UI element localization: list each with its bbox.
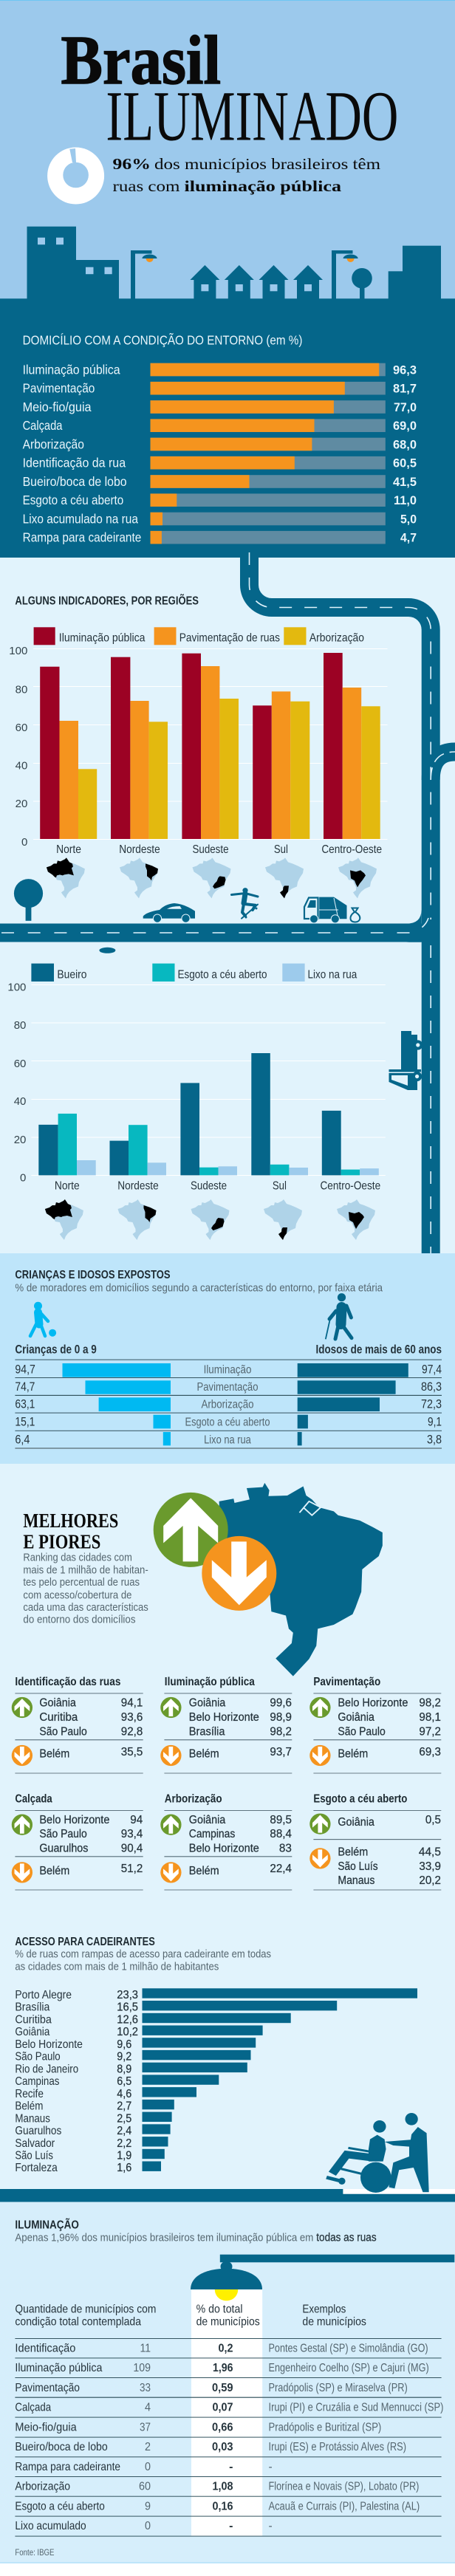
- region maps: [45, 1199, 375, 1240]
- bar chart: lighting, paving, trees: [40, 653, 380, 839]
- column headings: % do total: [196, 2303, 242, 2316]
- city names: Fortaleza: [15, 2162, 58, 2174]
- column headings: Exemplos: [302, 2303, 346, 2316]
- column headings: de municípios: [196, 2315, 260, 2328]
- city values: 9,2: [117, 2051, 131, 2063]
- table rules: [15, 2338, 442, 2537]
- subtitle: as cidades com mais de 1 milhão de habitantes: [15, 1961, 219, 1973]
- row counts: [133, 2342, 151, 2532]
- ranking: sidewalks: [12, 1792, 143, 1891]
- panel: best and worst background: [0, 1464, 455, 2189]
- row names: Lixo acumulado: [15, 2520, 86, 2532]
- row examples: Irupi (ES) e Protássio Alves (RS): [269, 2441, 406, 2453]
- grid and axis: [7, 981, 386, 1185]
- row counts: 33: [140, 2382, 151, 2394]
- ranking: street identification: [12, 1676, 143, 1774]
- city values: 2,7: [117, 2100, 131, 2113]
- row names: Arborização: [15, 2480, 70, 2493]
- ranking: open sewage: Belém: [338, 1846, 368, 1858]
- ranking: public lighting: 98,2: [270, 1725, 292, 1738]
- bar values: 68,0: [393, 437, 417, 452]
- row values and labels: 72,3: [421, 1398, 442, 1411]
- ranking: street identification: São Paulo: [39, 1725, 87, 1738]
- bar values: 77,0: [394, 400, 417, 414]
- ranking: paving: 98,1: [419, 1711, 441, 1724]
- city names: Manaus: [15, 2112, 50, 2125]
- bar values: [393, 363, 417, 545]
- subtitle text: 96%: [112, 155, 151, 173]
- city names: Belém: [15, 2100, 43, 2113]
- bar chart: conditions: [151, 363, 386, 544]
- legend: Lixo na rua: [307, 969, 357, 982]
- ranking: sidewalks: 94: [130, 1814, 143, 1826]
- bar labels: Lixo acumulado na rua: [23, 511, 138, 526]
- description: do entorno dos domicílios: [23, 1613, 136, 1626]
- region labels: Norte: [55, 1179, 80, 1192]
- ranking: paving: São Paulo: [338, 1725, 386, 1738]
- region labels: Sul: [274, 843, 288, 856]
- bar values: 81,7: [393, 382, 417, 396]
- region labels: Sudeste: [191, 1179, 227, 1192]
- region maps: [47, 857, 377, 898]
- ranking: paving: [309, 1676, 441, 1774]
- grid and axis: 60: [16, 722, 27, 734]
- row values and labels: 3,8: [427, 1433, 442, 1446]
- row names: Pavimentação: [15, 2382, 80, 2394]
- donut chart: 96%: [47, 148, 104, 204]
- city values: 12,6: [117, 2013, 138, 2027]
- grid and axis: 80: [14, 1019, 26, 1032]
- bar labels: Rampa para cadeirante: [23, 530, 141, 545]
- row values and labels: 97,4: [422, 1363, 442, 1376]
- bar values: 60,5: [393, 456, 417, 470]
- heading: ILUMINAÇÃO: [15, 2216, 79, 2231]
- bar chart: drains, sewage, trash: [38, 1053, 379, 1175]
- row counts: 109: [133, 2362, 151, 2374]
- heading: DOMICÍLIO COM A CONDIÇÃO DO ENTORNO (em %): [23, 332, 302, 348]
- row counts: 37: [140, 2421, 151, 2433]
- description: com acesso/cobertura de: [23, 1589, 131, 1601]
- subtitle: % de ruas com rampas de acesso para cadeirante em todas: [15, 1948, 271, 1961]
- title: [61, 22, 398, 155]
- grid and axis: 80: [16, 684, 27, 696]
- row percentages: 1,08: [213, 2480, 233, 2493]
- row counts: 2: [145, 2441, 151, 2453]
- ranking: open sewage: Esgoto a céu aberto: [313, 1792, 408, 1805]
- panel: best and worst intro: [23, 1483, 383, 1676]
- row examples: Florínea e Novais (SP), Lobato (PR): [269, 2480, 419, 2493]
- butterfly bars: children: [62, 1363, 171, 1445]
- ranking: open sewage: 20,2: [419, 1874, 441, 1887]
- ranking: paving: Pavimentação: [313, 1676, 380, 1688]
- subtitle text: dos municípios brasileiros têm: [154, 155, 380, 173]
- ranking: paving: 69,3: [419, 1746, 441, 1758]
- row counts: 4: [145, 2402, 151, 2414]
- legend: Iluminação pública: [59, 632, 146, 645]
- bar values: 96,3: [393, 363, 417, 377]
- grid and axis: [9, 645, 388, 849]
- bar labels: Bueiro/boca de lobo: [23, 474, 127, 489]
- icon: child with ball: [30, 1302, 56, 1337]
- heading: ACESSO PARA CADEIRANTES: [15, 1936, 155, 1948]
- map of Brazil: [219, 1483, 383, 1676]
- row names: Iluminação pública: [15, 2362, 102, 2374]
- ranking: public lighting: Belo Horizonte: [189, 1711, 259, 1724]
- row values and labels: 86,3: [421, 1380, 442, 1394]
- row values and labels: 63,1: [15, 1398, 35, 1411]
- bar labels: Pavimentação: [23, 381, 95, 396]
- grid and axis: 40: [16, 759, 27, 773]
- ranking: trees: Belo Horizonte: [189, 1842, 259, 1855]
- panel: dark ground with condition bars: [0, 298, 455, 558]
- region labels: Centro-Oeste: [320, 1179, 380, 1192]
- row percentages: 0,16: [213, 2500, 233, 2512]
- city names: Belo Horizonte: [15, 2038, 83, 2051]
- butterfly bars: elderly: [298, 1363, 408, 1445]
- ranking: street identification: 92,8: [121, 1725, 143, 1738]
- road illustration: [0, 552, 455, 1253]
- ranking: street identification: 94,1: [121, 1697, 143, 1710]
- row examples: Pradópolis e Buritizal (SP): [269, 2421, 381, 2433]
- ranking: sidewalks: 51,2: [121, 1863, 143, 1875]
- row values and labels: 94,7: [15, 1363, 35, 1376]
- bar values: 69,0: [393, 419, 417, 433]
- panel: lighting table background: [0, 2202, 455, 2563]
- city names: São Luís: [15, 2149, 53, 2162]
- decorative top strip: [0, 0, 455, 1]
- ranking: public lighting: Goiânia: [189, 1697, 226, 1710]
- city values: 6,5: [117, 2075, 131, 2088]
- row counts: 0: [145, 2520, 151, 2532]
- row values and labels: 9,1: [428, 1416, 442, 1429]
- row counts: 9: [145, 2500, 151, 2512]
- grid and axis: 60: [14, 1058, 26, 1070]
- panel: indicators by region: [9, 593, 388, 898]
- ranking: paving: 97,2: [419, 1725, 441, 1738]
- ranking: public lighting: Brasília: [189, 1725, 225, 1738]
- ranking: open sewage: Manaus: [338, 1874, 375, 1887]
- row percentages: 0,2: [219, 2342, 233, 2354]
- city names: Porto Alegre: [15, 1989, 72, 2001]
- ranking: trees: 88,4: [270, 1828, 292, 1840]
- ranking: paving: Belém: [338, 1748, 368, 1761]
- description: tes pelo percentual de ruas: [23, 1576, 140, 1589]
- subtitle: [15, 1948, 271, 1973]
- row percentages: 1,96: [213, 2362, 233, 2374]
- highlighted column: [191, 2289, 262, 2536]
- row names: Esgoto a céu aberto: [15, 2500, 105, 2512]
- row names: Identificação: [15, 2342, 75, 2354]
- description: mais de 1 milhão de habitan-: [23, 1563, 148, 1576]
- row percentages: 0,03: [212, 2441, 233, 2453]
- grid and axis: 0: [21, 836, 27, 849]
- bar labels: Meio-fio/guia: [23, 400, 92, 414]
- heading: MELHORES: [23, 1510, 118, 1532]
- heading: CRIANÇAS E IDOSOS EXPOSTOS: [15, 1269, 171, 1281]
- row values and labels: 15,1: [15, 1416, 35, 1429]
- row names: [15, 2342, 120, 2532]
- icon: wheelchair with caregiver: [326, 2113, 429, 2193]
- ranking: open sewage: 44,5: [419, 1846, 441, 1858]
- bar labels: Arborização: [23, 437, 84, 452]
- city names: Campinas: [15, 2075, 59, 2088]
- ranking: sidewalks: 90,4: [121, 1842, 143, 1855]
- heading: [23, 1510, 118, 1552]
- row values and labels: [15, 1363, 442, 1446]
- legend: Esgoto a céu aberto: [177, 969, 267, 982]
- icon: tree: [14, 879, 43, 921]
- grid and axis: 100: [9, 645, 27, 657]
- city names: Recife: [15, 2088, 44, 2100]
- grid and axis: 20: [16, 798, 27, 810]
- column headings: Quantidade de municípios com: [15, 2303, 156, 2316]
- ranking: open sewage: São Luís: [338, 1860, 378, 1873]
- ranking: street identification: Identificação das ruas: [15, 1676, 120, 1688]
- row examples: Pradópolis (SP) e Miraselva (PR): [269, 2382, 408, 2394]
- bar values: 4,7: [400, 531, 417, 545]
- grid and axis: 40: [14, 1095, 26, 1108]
- row percentages: -: [229, 2461, 233, 2473]
- row values and labels: Pavimentação: [196, 1381, 259, 1394]
- bar labels: Esgoto a céu aberto: [23, 493, 123, 507]
- ranking: public lighting: 99,6: [270, 1697, 292, 1710]
- subtitle: Apenas 1,96% dos municípios brasileiros tem iluminação pública em: [15, 2231, 313, 2244]
- city values: 2,4: [117, 2125, 132, 2137]
- ranking: street identification: 93,6: [121, 1711, 143, 1724]
- city values: [117, 1989, 138, 2174]
- ranking: sidewalks: Belo Horizonte: [39, 1814, 109, 1826]
- region labels: Nordeste: [119, 843, 160, 856]
- bar labels: [23, 362, 141, 545]
- ranking: paving: Goiânia: [338, 1711, 374, 1724]
- city names: Brasília: [15, 2001, 49, 2014]
- grid and axis: 20: [14, 1134, 26, 1146]
- table rules: [15, 1360, 442, 1449]
- subtitle text: [112, 155, 380, 195]
- bar labels: Calçada: [23, 418, 63, 433]
- icon: manhole: [99, 948, 115, 953]
- ranking: public lighting: 98,9: [270, 1711, 292, 1724]
- bar values: 41,5: [393, 475, 417, 489]
- ranking: public lighting: Iluminação pública: [165, 1676, 255, 1688]
- legend: [31, 964, 357, 982]
- ranking: street identification: 35,5: [121, 1746, 143, 1758]
- ground band: [0, 2189, 455, 2202]
- ranking: street identification: Belém: [39, 1748, 69, 1761]
- city names: Curitiba: [15, 2013, 52, 2027]
- city values: 4,6: [117, 2088, 131, 2100]
- city values: 2,5: [117, 2112, 131, 2125]
- row values and labels: Esgoto a céu aberto: [185, 1417, 270, 1429]
- row values and labels: Lixo na rua: [204, 1433, 251, 1446]
- city names: Goiânia: [15, 2026, 49, 2038]
- ranking: public lighting: Belém: [189, 1748, 219, 1761]
- city values: 9,6: [117, 2038, 131, 2051]
- city values: 10,2: [117, 2026, 138, 2038]
- panel: children and elderly background: [0, 1253, 455, 1464]
- row values and labels: 6,4: [15, 1433, 30, 1446]
- row values and labels: 74,7: [15, 1380, 35, 1394]
- legend: Bueiro: [57, 969, 87, 982]
- ranking: sidewalks: 93,4: [121, 1828, 143, 1840]
- ranking: trees: Goiânia: [189, 1814, 226, 1826]
- bar chart: cities: [142, 1988, 417, 2171]
- ranking: sidewalks: Guarulhos: [39, 1842, 89, 1855]
- row names: Bueiro/boca de lobo: [15, 2441, 108, 2453]
- ranking: public lighting: [160, 1676, 292, 1774]
- city values: 8,9: [117, 2063, 131, 2075]
- region labels: Nordeste: [117, 1179, 159, 1192]
- ranking: trees: [160, 1792, 292, 1891]
- ranking: sidewalks: Belém: [39, 1865, 69, 1877]
- ranking: paving: Belo Horizonte: [338, 1697, 408, 1710]
- icon: big down arrow: [202, 1536, 276, 1611]
- ranking: street identification: Curitiba: [39, 1711, 78, 1724]
- icon: skateboarder: [232, 888, 258, 919]
- bar values: 5,0: [400, 513, 417, 526]
- row names: Meio-fio/guia: [15, 2421, 77, 2433]
- legend: Pavimentação de ruas: [179, 632, 280, 645]
- row percentages: [212, 2342, 233, 2532]
- row examples: -: [269, 2520, 273, 2532]
- panel: regions background: [0, 558, 455, 1253]
- title: Brasil: [61, 22, 221, 99]
- ranking: public lighting: 93,7: [270, 1746, 292, 1758]
- column headings: Crianças de 0 a 9: [15, 1343, 97, 1357]
- description: [23, 1552, 148, 1626]
- region labels: [56, 843, 382, 856]
- row percentages: 0,66: [212, 2421, 233, 2433]
- row examples: [269, 2342, 443, 2532]
- icon: elderly person with cane: [326, 1293, 352, 1339]
- icon: truck on vertical road: [389, 1031, 422, 1090]
- row counts: 0: [145, 2461, 151, 2473]
- ranking: sidewalks: Calçada: [15, 1792, 52, 1805]
- panel: children and elderly exposed: [15, 1269, 442, 1449]
- city names: [15, 1989, 83, 2174]
- heading: E PIORES: [23, 1530, 100, 1552]
- city values: 1,9: [117, 2149, 131, 2162]
- row percentages: 0,59: [212, 2382, 233, 2394]
- row values and labels: Iluminação: [204, 1363, 251, 1376]
- legend: Arborização: [309, 632, 364, 645]
- ranking: street identification: Goiânia: [39, 1697, 76, 1710]
- city names: São Paulo: [15, 2051, 61, 2063]
- bar labels: Iluminação pública: [23, 362, 120, 377]
- row counts: 11: [140, 2342, 151, 2354]
- column headings: de municípios: [302, 2315, 366, 2328]
- row names: Rampa para cadeirante: [15, 2461, 120, 2473]
- city values: 1,6: [117, 2162, 131, 2174]
- ranking: paving: 98,2: [419, 1697, 441, 1710]
- column headings: [15, 1343, 442, 1357]
- source: Fonte: IBGE: [15, 2547, 54, 2558]
- icon: car: [143, 903, 195, 922]
- subtitle: todas as ruas: [316, 2231, 377, 2244]
- icon: street lamp: [191, 2255, 454, 2301]
- panel: wheelchair access: [15, 1936, 417, 2174]
- row counts: 60: [139, 2480, 151, 2493]
- row names: Calçada: [15, 2402, 51, 2414]
- ranking: trees: 83: [279, 1842, 292, 1855]
- row percentages: 0,07: [213, 2402, 233, 2414]
- ranking: sidewalks: São Paulo: [39, 1828, 87, 1840]
- subtitle text: iluminação pública: [185, 177, 342, 195]
- row percentages: -: [229, 2520, 233, 2532]
- row examples: Acauã e Currais (PI), Palestina (AL): [269, 2500, 420, 2512]
- legend: [34, 627, 364, 645]
- bar values: 11,0: [394, 493, 417, 507]
- icon: big up arrow: [154, 1493, 228, 1567]
- ranking: trees: 89,5: [270, 1814, 292, 1826]
- ranking: trees: Arborização: [165, 1792, 222, 1805]
- row values and labels: Arborização: [201, 1399, 254, 1411]
- icon: garbage truck: [304, 897, 360, 923]
- footer strip: [0, 2562, 455, 2563]
- region labels: Sudeste: [192, 843, 229, 856]
- region labels: [55, 1179, 380, 1192]
- ranking: trees: 22,4: [270, 1863, 292, 1875]
- ranking: trees: Campinas: [189, 1828, 236, 1840]
- city names: Rio de Janeiro: [15, 2063, 78, 2075]
- ranking: open sewage: Goiânia: [338, 1816, 374, 1829]
- city values: 2,2: [117, 2137, 131, 2150]
- ranking: trees: Belém: [189, 1865, 219, 1877]
- ranking: open sewage: [309, 1792, 441, 1891]
- description: cada uma das características: [23, 1601, 148, 1614]
- ranking: open sewage: 33,9: [419, 1860, 441, 1873]
- row examples: -: [269, 2461, 273, 2473]
- subtitle: % de moradores em domicílios segundo a características do entorno, por faixa etária: [15, 1281, 383, 1294]
- region labels: Centro-Oeste: [321, 843, 382, 856]
- grid and axis: 0: [20, 1171, 26, 1185]
- skyline illustration: [27, 227, 441, 301]
- region labels: Norte: [56, 843, 81, 856]
- bar labels: Identificação da rua: [23, 456, 126, 470]
- panel: header sky background: [0, 0, 455, 299]
- heading: ALGUNS INDICADORES, POR REGIÕES: [15, 593, 199, 608]
- column headings: [15, 2303, 366, 2328]
- column headings: condição total contemplada: [15, 2315, 141, 2328]
- ranking: open sewage: 0,5: [425, 1814, 441, 1826]
- subtitle text: ruas com: [112, 177, 180, 195]
- city names: Salvador: [15, 2137, 55, 2150]
- grid and axis: 100: [7, 981, 26, 994]
- panel: drains, sewage, trash by region: [7, 964, 386, 1240]
- description: Ranking das cidades com: [23, 1552, 132, 1564]
- city values: 23,3: [117, 1989, 138, 2001]
- region labels: Sul: [273, 1179, 287, 1192]
- panel: lighting table: [15, 2216, 454, 2558]
- city names: Guarulhos: [15, 2125, 61, 2137]
- city values: 16,5: [117, 2001, 138, 2014]
